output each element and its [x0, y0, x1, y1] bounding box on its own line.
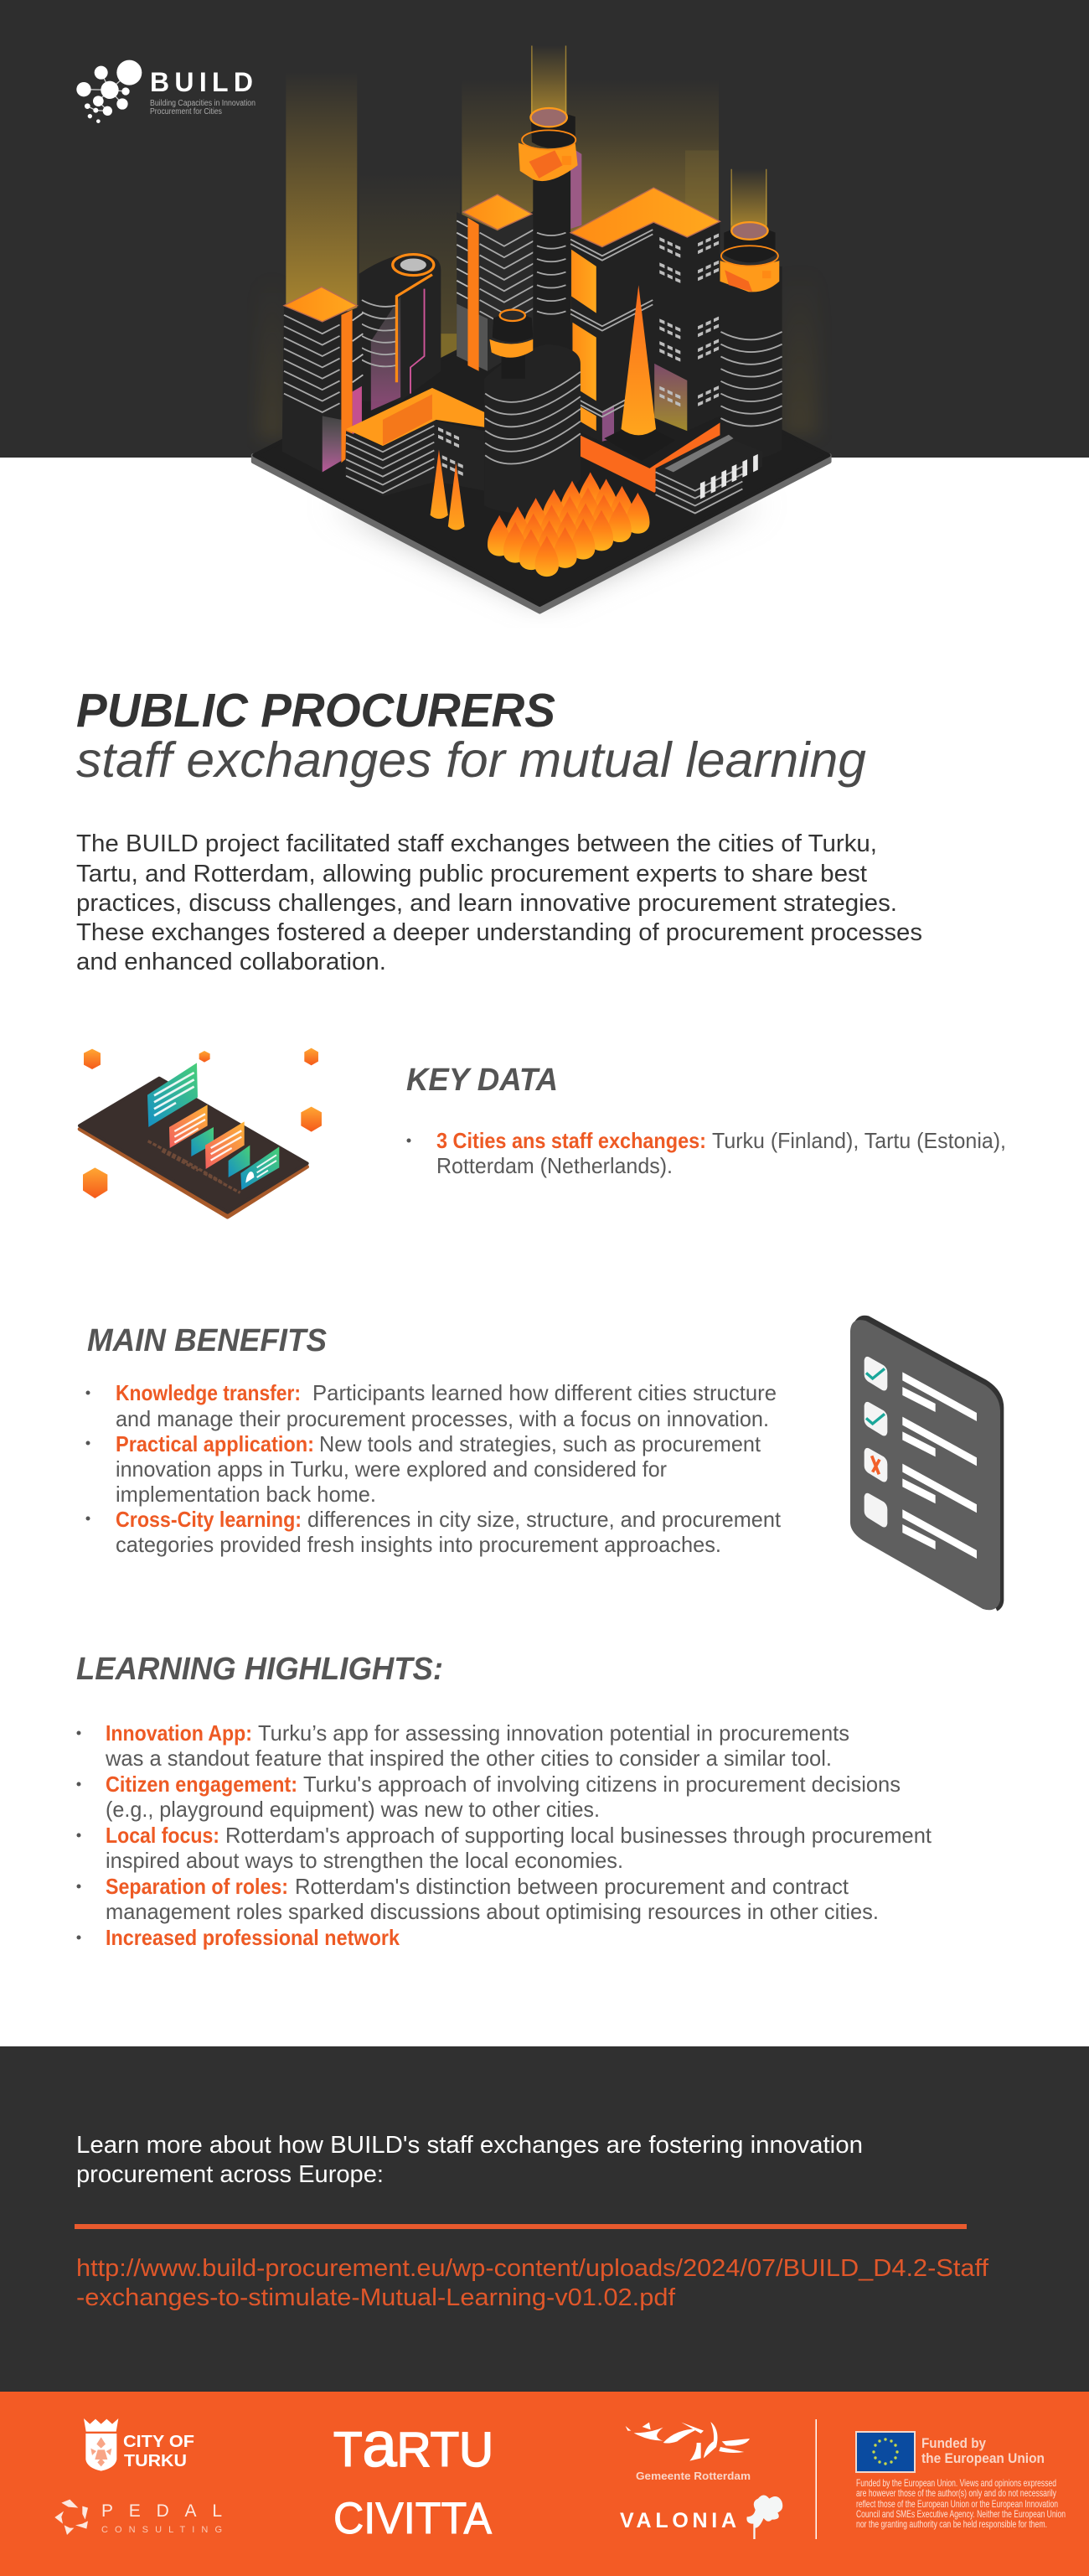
highlight: separation of roles: management roles sparked discussions about optimising resources in other cities. — [106, 1899, 879, 1924]
city platform — [253, 309, 829, 612]
wordmark: CITY OF — [123, 2433, 194, 2451]
building: central tall tower — [519, 108, 581, 349]
bullets — [85, 1391, 90, 1520]
logo: Tartu: TaRTU — [333, 2409, 493, 2480]
link text: http://www.build-procurement.eu/wp-content/uploads/2024/07/BUILD_D4.2-Staff — [76, 2255, 989, 2282]
building: left tower — [282, 287, 363, 472]
bullet — [407, 1138, 410, 1143]
benefit: practical application: New tools and strategies, such as procurement — [319, 1431, 761, 1456]
flag stars — [872, 2438, 899, 2465]
benefit: cross-city learning: categories provided fresh insights into procurement approaches. — [116, 1532, 721, 1557]
benefit: cross-city learning: differences in city size, structure, and procurement — [307, 1507, 782, 1532]
benefit: practical application: Practical application: — [116, 1431, 314, 1456]
intro paragraph — [76, 830, 922, 975]
benefit: knowledge transfer: Participants learned how different cities structure — [312, 1380, 777, 1405]
wordmark: TURKU — [124, 2452, 187, 2470]
highlight: citizen engagement: Turku's approach of involving citizens in procurement decisions — [303, 1772, 901, 1797]
illustration: isometric city — [253, 45, 829, 612]
orange rule — [75, 2224, 967, 2229]
dark background — [0, 2046, 1089, 2392]
section: main benefits — [85, 1323, 782, 1557]
logo tagline: Building Capacities in Innovation — [150, 99, 255, 108]
highlight: innovation app: was a standout feature that inspired the other cities to consider a similar tool. — [105, 1746, 832, 1771]
floating orange cubes — [83, 1048, 322, 1198]
title — [76, 684, 866, 788]
oak leaf mark — [746, 2495, 782, 2539]
divider — [816, 2419, 817, 2539]
orange plaza — [581, 422, 720, 493]
highlight: separation of roles: Separation of roles: — [106, 1874, 288, 1899]
link text — [76, 2255, 989, 2311]
logo wordmark: BUILD — [150, 67, 253, 97]
intro paragraph: Tartu, and Rotterdam, allowing public procurement experts to share best — [76, 861, 867, 887]
icon: phone with message cards — [80, 1048, 322, 1217]
highlight: local focus: Rotterdam's approach of supporting local businesses through procurement — [225, 1823, 932, 1848]
logo: BUILD — [76, 60, 255, 123]
clipboard body — [850, 1320, 1000, 1610]
phone body — [80, 1079, 307, 1217]
highlight: local focus — [106, 1823, 932, 1873]
logo: Pedal Consulting — [54, 2500, 222, 2535]
panel: partner logos — [0, 2392, 1089, 2576]
front cylinder tower — [484, 310, 581, 513]
clipboard edge — [854, 1316, 1003, 1611]
highlight: citizen engagement — [106, 1772, 901, 1822]
tagline: CONSULTING — [101, 2525, 222, 2535]
wordmark: VALONIA — [620, 2509, 736, 2532]
dark plaza base — [604, 422, 675, 461]
message card: coral — [169, 1104, 208, 1148]
wordmark: PEDAL — [101, 2501, 222, 2521]
benefit: knowledge transfer: and manage their procurement processes, with a focus on innovation. — [116, 1406, 769, 1431]
wordmark: Gemeente Rotterdam — [636, 2470, 751, 2482]
benefit: knowledge transfer — [116, 1380, 777, 1431]
section: key data — [406, 1063, 1006, 1178]
grove of flame trees — [488, 472, 650, 577]
pinwheel mark — [54, 2500, 88, 2535]
icon: checklist clipboard — [850, 1316, 1003, 1611]
logo: Civitta: CIVITTA — [333, 2494, 493, 2543]
list item: Rotterdam (Netherlands). — [436, 1153, 673, 1178]
benefit: cross-city learning: Cross-City learning: — [116, 1507, 302, 1532]
funded by label: Funded by — [921, 2435, 986, 2451]
heading: KEY DATA — [406, 1063, 558, 1098]
message card: coral second — [205, 1121, 245, 1169]
checkbox: ticked — [864, 1357, 887, 1390]
building: right round tower — [720, 222, 782, 458]
highlight: innovation app — [105, 1720, 849, 1771]
heading: MAIN BENEFITS — [87, 1323, 327, 1358]
message card: profile — [240, 1146, 279, 1190]
building: large right block — [570, 188, 720, 442]
highlight: citizen engagement: (e.g., playground equipment) was new to other cities. — [106, 1797, 600, 1822]
logo: Gemeente Rotterdam — [626, 2422, 751, 2482]
small cones — [431, 450, 465, 530]
logo: Valonia — [620, 2495, 782, 2539]
highlight: local focus: Local focus: — [106, 1823, 219, 1848]
tall cone spire — [622, 285, 656, 435]
highlight: innovation app: Innovation App: — [106, 1720, 252, 1746]
heading: LEARNING HIGHLIGHTS: — [76, 1652, 443, 1687]
logo mark: connected circles — [76, 60, 142, 123]
lion mark — [626, 2422, 750, 2461]
call to action text: Learn more about how BUILD's staff exchanges are fostering innovation — [76, 2132, 863, 2159]
logo tagline: Procurement for Cities — [150, 107, 222, 116]
building: front-left block — [345, 388, 484, 496]
funded by label: the European Union — [921, 2450, 1045, 2466]
link text: -exchanges-to-stimulate-Mutual-Learning-v01.02.pdf — [76, 2284, 676, 2311]
logo tagline — [150, 99, 255, 116]
city glow beams — [258, 45, 818, 438]
message card: small green — [229, 1146, 250, 1177]
intro paragraph: and enhanced collaboration. — [76, 949, 386, 975]
highlight: separation of roles — [106, 1874, 879, 1924]
list item: Turku (Finland), Tartu (Estonia), — [712, 1128, 1006, 1153]
intro paragraph: practices, discuss challenges, and learn innovative procurement strategies. — [76, 890, 897, 917]
benefit: practical application: implementation back home. — [116, 1482, 376, 1507]
checkbox: crossed — [864, 1448, 887, 1482]
building: back cylinder — [359, 253, 441, 411]
text rows — [902, 1372, 977, 1559]
call to action text — [76, 2132, 863, 2188]
logo: City of Turku — [84, 2418, 194, 2471]
list item — [436, 1128, 1006, 1178]
checkbox: empty — [864, 1493, 887, 1527]
benefit: practical application: innovation apps in Turku, were explored and considered for — [116, 1456, 667, 1482]
highlight: innovation app: Turku’s app for assessing innovation potential in procurements — [258, 1720, 849, 1746]
building: back mid tower — [457, 194, 535, 371]
highlight: citizen engagement: Citizen engagement: — [106, 1772, 297, 1797]
call to action text: procurement across Europe: — [76, 2161, 384, 2188]
funded by label — [921, 2435, 1045, 2466]
benefit: practical application — [116, 1431, 761, 1507]
highlight: separation of roles: Rotterdam's distinction between procurement and contract — [295, 1874, 849, 1899]
highlight: professional network: Increased professional network — [106, 1925, 400, 1950]
benefit: knowledge transfer: Knowledge transfer: — [116, 1380, 301, 1405]
EU disclaimer — [856, 2477, 1066, 2530]
orange background — [0, 2392, 1089, 2576]
message card: small teal — [191, 1127, 214, 1156]
bullets — [77, 1731, 80, 1939]
section: learning highlights — [76, 1652, 932, 1950]
low building with white bars — [656, 435, 762, 515]
intro paragraph: The BUILD project facilitated staff exchanges between the cities of Turku, — [76, 830, 877, 857]
wordmark — [123, 2433, 194, 2470]
benefit: cross-city learning — [116, 1507, 782, 1557]
platform shadow — [333, 502, 761, 599]
list item: 3 Cities ans staff exchanges: — [436, 1128, 706, 1153]
crest — [84, 2418, 118, 2471]
subtitle: staff exchanges for mutual learning — [76, 732, 866, 788]
highlight: local focus: inspired about ways to strengthen the local economies. — [106, 1848, 623, 1873]
logo: EU flag — [856, 2432, 915, 2472]
panel: learn more footer — [0, 2046, 1089, 2392]
header dark band — [0, 0, 1089, 458]
checkbox: ticked — [864, 1402, 887, 1435]
message card: large teal — [147, 1063, 198, 1127]
intro paragraph: These exchanges fostered a deeper understanding of procurement processes — [76, 919, 922, 946]
title main line: PUBLIC PROCURERS — [76, 684, 555, 737]
